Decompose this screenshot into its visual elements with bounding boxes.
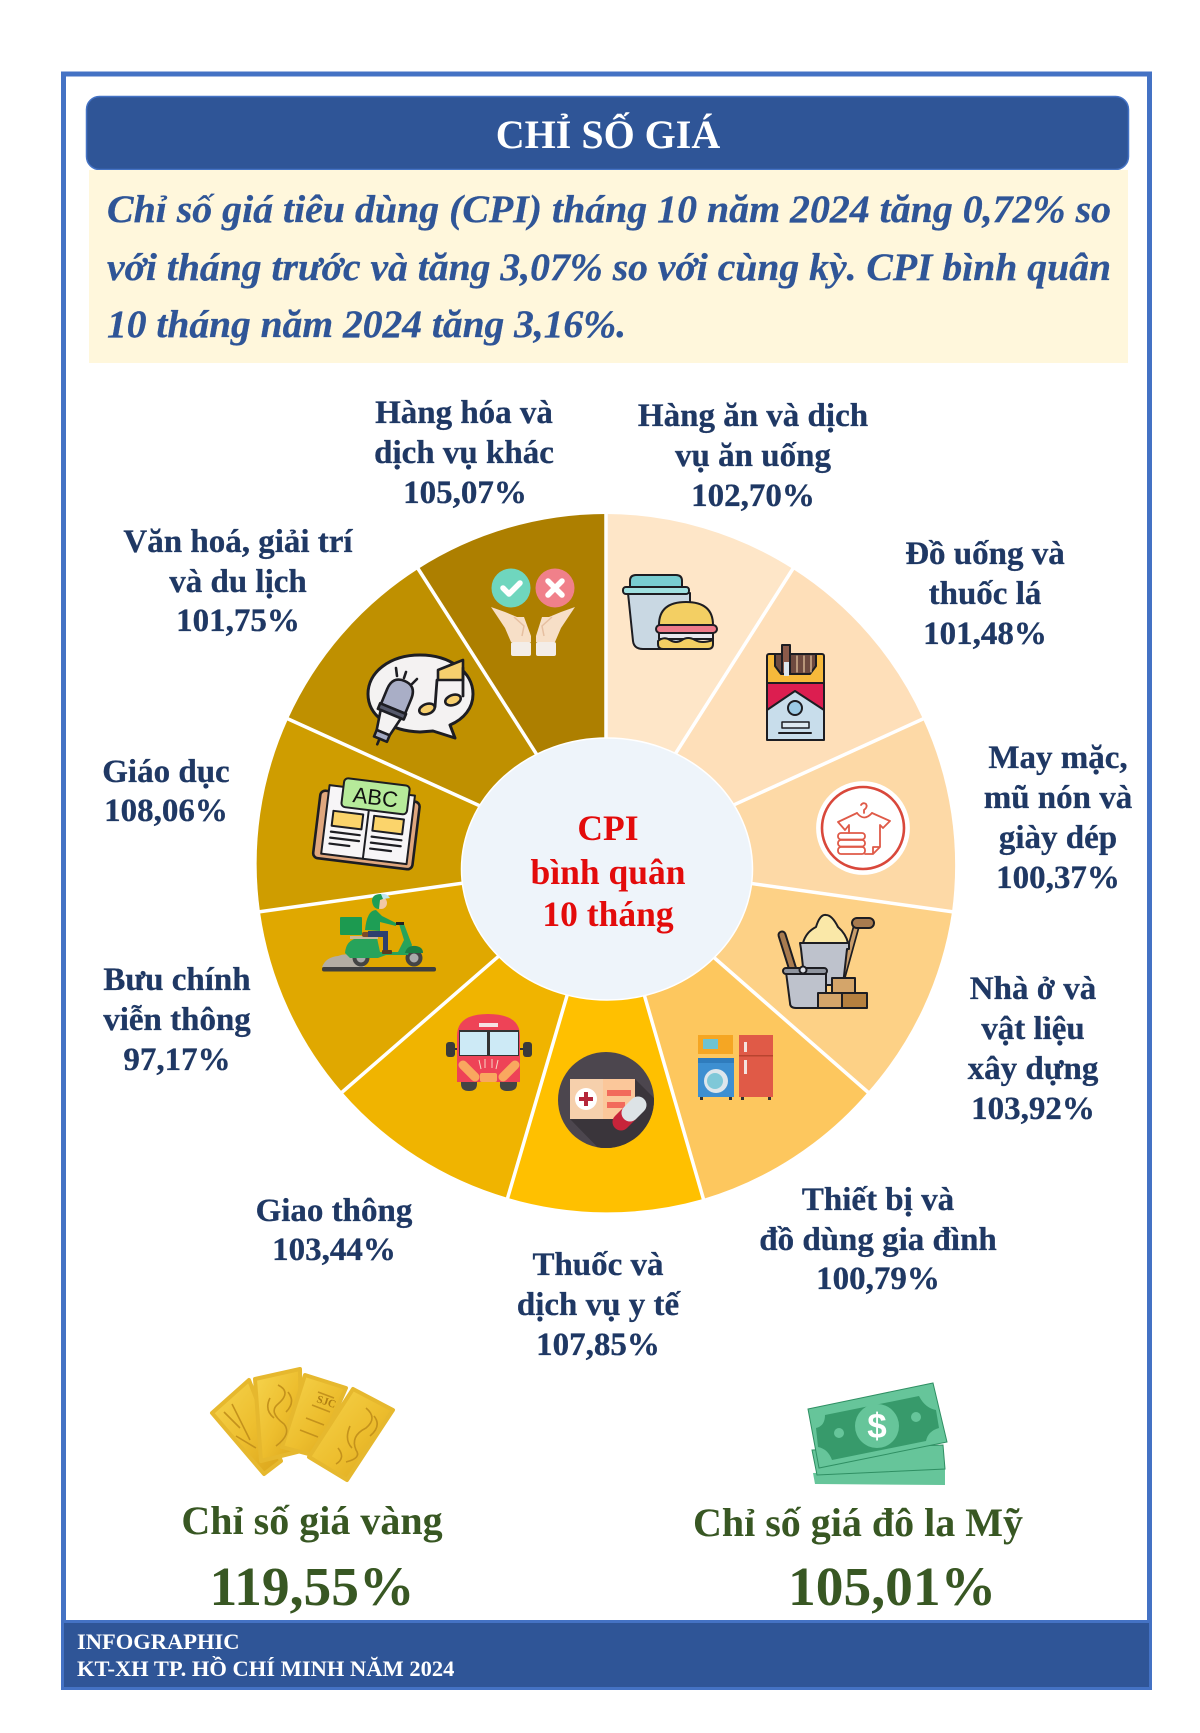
center circle: CPI bình quân 10 tháng: bình quân xyxy=(531,852,686,892)
label: Nhà ở và vật liệu xây dựng: xây dựng xyxy=(968,1051,1099,1087)
label: May mặc, mũ nón và giày dép: giày dép xyxy=(999,820,1117,856)
label: Bưu chính viễn thông: 97,17% xyxy=(123,1042,231,1078)
label: Hàng ăn và dịch vụ ăn uống: Hàng ăn và dịch xyxy=(638,398,868,434)
footer bar xyxy=(62,1622,1150,1688)
icon: microphone and music notes xyxy=(365,655,473,750)
icon: home appliances xyxy=(698,1035,773,1100)
label: May mặc, mũ nón và giày dép: mũ nón và xyxy=(984,780,1132,816)
label: May mặc, mũ nón và giày dép: May mặc, xyxy=(988,740,1128,776)
label: Nhà ở và vật liệu xây dựng xyxy=(968,971,1099,1127)
label: Bưu chính viễn thông: viễn thông xyxy=(103,1002,251,1038)
label: Đồ uống và thuốc lá xyxy=(905,536,1065,652)
center circle: CPI bình quân 10 tháng: 10 tháng xyxy=(542,894,674,934)
US dollar price index: 105,01% xyxy=(788,1557,996,1618)
label: May mặc, mũ nón và giày dép: 100,37% xyxy=(996,860,1120,896)
icon: hands with check and cross xyxy=(491,568,575,656)
gold price index: 119,55% xyxy=(209,1557,415,1618)
label: Giáo dục: Giáo dục xyxy=(102,754,230,790)
label: Hàng hóa và dịch vụ khác: dịch vụ khác xyxy=(374,435,554,471)
footer bar: KT-XH TP. HỒ CHÍ MINH NĂM 2024 xyxy=(77,1655,454,1681)
summary text panel: Chỉ số giá tiêu dùng (CPI) tháng 10 năm 2024 tăng 0,72% so xyxy=(107,187,1111,231)
icon: clothes xyxy=(817,782,909,874)
gold price index xyxy=(181,1498,443,1618)
label: Giao thông: 103,44% xyxy=(272,1232,396,1268)
label: Hàng hóa và dịch vụ khác: 105,07% xyxy=(403,475,527,511)
label: Đồ uống và thuốc lá: thuốc lá xyxy=(929,576,1041,612)
label: Hàng hóa và dịch vụ khác xyxy=(374,395,554,511)
footer bar: INFOGRAPHIC xyxy=(77,1629,240,1654)
label: Giao thông xyxy=(256,1193,413,1268)
center circle: CPI bình quân 10 tháng: CPI xyxy=(577,808,639,848)
icon: ABC book xyxy=(313,775,422,870)
US dollar price index xyxy=(693,1500,1023,1618)
label: Thuốc và dịch vụ y tế: dịch vụ y tế xyxy=(517,1287,681,1323)
label: Nhà ở và vật liệu xây dựng: Nhà ở và xyxy=(970,971,1096,1007)
label: Thiết bị và đồ dùng gia đình: 100,79% xyxy=(816,1261,940,1297)
label: Bưu chính viễn thông xyxy=(103,962,251,1078)
icon: gold bars: SJC xyxy=(315,1393,337,1411)
icon: gold bars xyxy=(212,1369,393,1480)
icon: ABC book: ABC xyxy=(351,782,400,812)
label: Thiết bị và đồ dùng gia đình: Thiết bị và xyxy=(802,1182,954,1218)
label: Thiết bị và đồ dùng gia đình: đồ dùng gia đình xyxy=(759,1222,997,1258)
label: Hàng ăn và dịch vụ ăn uống: vụ ăn uống xyxy=(675,438,831,474)
summary text panel: với tháng trước và tăng 3,07% so với cùng kỳ. CPI bình quân xyxy=(107,245,1111,289)
label: Giao thông: Giao thông xyxy=(256,1193,413,1229)
header: title bar xyxy=(86,96,1128,170)
icon: bus xyxy=(446,1014,532,1091)
label: Văn hoá, giải trí và du lịch: và du lịch xyxy=(169,564,307,600)
summary text panel: 10 tháng năm 2024 tăng 3,16%. xyxy=(107,302,626,346)
icon: medical card and pill xyxy=(558,1052,654,1148)
label: Thuốc và dịch vụ y tế xyxy=(517,1247,681,1363)
label: Bưu chính viễn thông: Bưu chính xyxy=(103,962,251,998)
gold price index: Chỉ số giá vàng xyxy=(181,1498,443,1543)
center circle: CPI bình quân 10 tháng xyxy=(462,738,752,1000)
label: Hàng ăn và dịch vụ ăn uống xyxy=(638,398,868,514)
label: Nhà ở và vật liệu xây dựng: 103,92% xyxy=(971,1091,1095,1127)
label: Thuốc và dịch vụ y tế: 107,85% xyxy=(536,1327,660,1363)
icon: US dollar bills: $ xyxy=(867,1407,887,1446)
summary text panel xyxy=(89,170,1128,363)
label: Nhà ở và vật liệu xây dựng: vật liệu xyxy=(981,1011,1085,1047)
icon: US dollar bills xyxy=(808,1383,947,1485)
pie chart: CPI by category xyxy=(257,512,955,1212)
label: May mặc, mũ nón và giày dép xyxy=(984,740,1132,896)
label: Đồ uống và thuốc lá: 101,48% xyxy=(923,616,1047,652)
label: Văn hoá, giải trí và du lịch: 101,75% xyxy=(176,603,300,639)
label: Giáo dục: 108,06% xyxy=(104,793,228,829)
label: Đồ uống và thuốc lá: Đồ uống và xyxy=(905,536,1065,572)
label: Giáo dục xyxy=(102,754,230,829)
icon: cigarette pack xyxy=(767,645,824,740)
label: Thiết bị và đồ dùng gia đình xyxy=(759,1182,997,1297)
US dollar price index: Chỉ số giá đô la Mỹ xyxy=(693,1500,1023,1545)
header: title bar: CHỈ SỐ GIÁ xyxy=(496,111,720,157)
label: Thuốc và dịch vụ y tế: Thuốc và xyxy=(532,1247,664,1283)
icon: drink and burger xyxy=(623,575,717,649)
label: Văn hoá, giải trí và du lịch: Văn hoá, giải trí xyxy=(123,524,353,560)
label: Văn hoá, giải trí và du lịch xyxy=(123,524,353,639)
label: Hàng hóa và dịch vụ khác: Hàng hóa và xyxy=(375,395,553,431)
icon: delivery scooter xyxy=(322,894,436,972)
icon: construction materials xyxy=(782,915,874,1008)
label: Hàng ăn và dịch vụ ăn uống: 102,70% xyxy=(691,478,815,514)
